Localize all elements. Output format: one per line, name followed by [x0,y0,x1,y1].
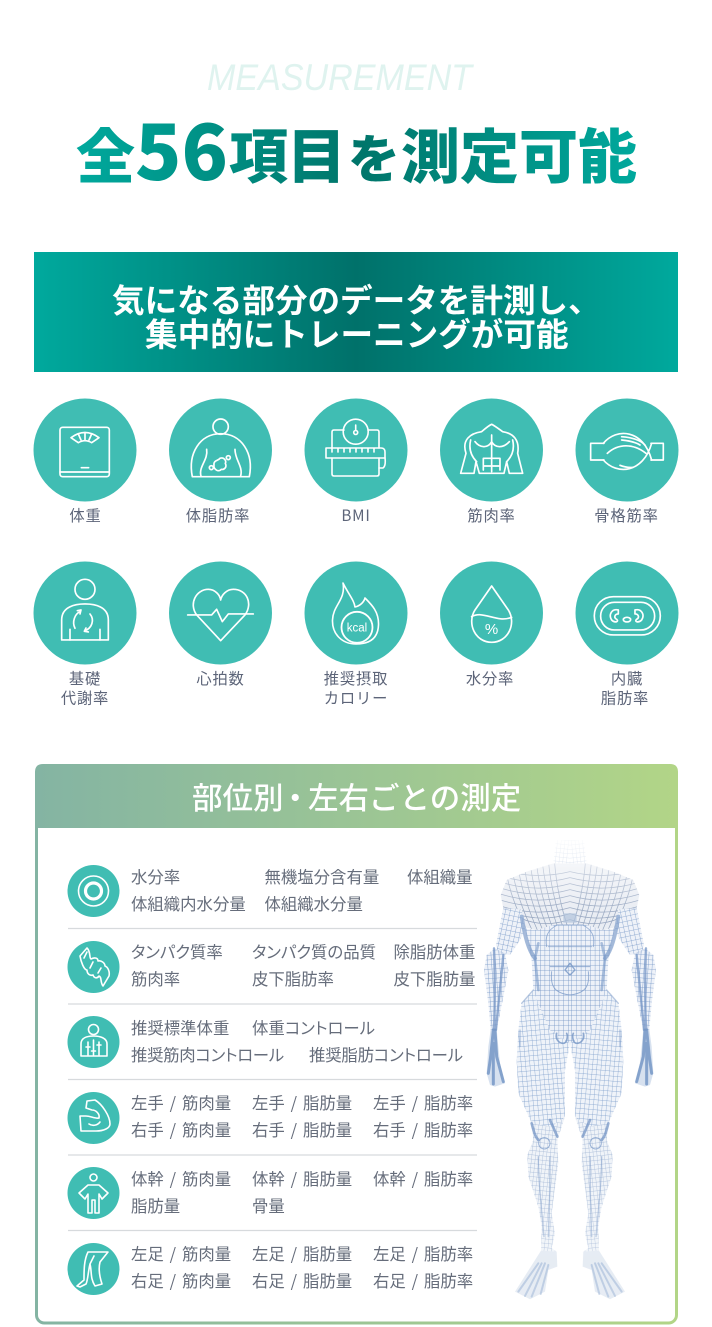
title: 全56項目を測定可能: 全 [76,110,135,195]
icon: 水分率: % [485,621,498,638]
icon: 水分率: 水分率 [466,667,514,689]
row: 推奨標準体重: 推奨筋肉コントロール [131,1042,284,1066]
banner [34,252,678,372]
icon: 水分率 [440,562,543,689]
row: 左足右足: 右足 / 脂肪率 [373,1268,473,1292]
icon: 骨格筋率: 骨格筋率 [594,504,659,526]
icon: 心拍数: 心拍数 [196,667,245,689]
label: MEASUREMENT: MEASUREMENT [207,57,474,98]
icon: 体脂肪率 [169,398,272,526]
title: 全56項目を測定可能: 目 [287,110,346,195]
row: タンパク質率: タンパク質率 [131,939,223,963]
icon: 体重 [34,398,136,526]
panel header [35,764,678,828]
row: 左足右足: 左足 / 脂肪量 [252,1241,352,1265]
icon: 心拍数 [169,562,272,689]
title: 全56項目を測定可能: 56 [135,92,228,202]
row: 左手右手: 左手 / 脂肪量 [252,1090,352,1114]
row: 左足右足: 左足 / 筋肉量 [131,1241,231,1265]
banner text: 気になる部分のデータを計測し、 [112,275,601,322]
row: 左足右足: 右足 / 筋肉量 [131,1268,231,1292]
icon: 推奨摂取カロリー: カロリー [324,686,388,708]
panel header: 部位別 [192,774,284,818]
row: タンパク質率: タンパク質の品質 [252,939,376,963]
panel: metric icons grid [34,398,678,708]
row: 推奨標準体重: 体重コントロール [252,1015,375,1039]
wireframe body figure [484,840,656,1299]
row: 左手右手: 左手 / 脂肪率 [373,1090,473,1114]
title: 全56項目を測定可能: 項 [229,110,288,195]
row: タンパク質率: 皮下脂肪率 [252,966,334,990]
icon: 内臓脂肪率: 脂肪率 [601,686,649,708]
row: タンパク質率: 筋肉率 [131,966,180,990]
row: 体幹 [68,1166,473,1219]
icon: BMI [304,398,408,526]
icon: 体重: 体重 [69,504,102,526]
row: 推奨標準体重: 推奨標準体重 [131,1015,229,1039]
title: 全56項目を測定可能: 測定可能 [401,110,637,195]
banner text: 集中的にトレーニングが可能 [145,309,569,356]
row: 体幹: 脂肪量 [131,1193,180,1217]
row: 水分率: 体組織量 [407,864,473,888]
icon: 基礎代謝率 [34,562,136,708]
icon: 推奨摂取カロリー [304,562,408,708]
panel header: 左右ごとの測定 [308,774,521,818]
icon: 内臓脂肪率 [576,562,678,708]
row: タンパク質率: 除脂肪体重 [394,939,475,963]
row: 左足右足 [68,1241,473,1295]
title: 全56項目を測定可能 [76,92,637,202]
row: 水分率: 無機塩分含有量 [264,864,379,888]
icon: BMI: BMI [341,504,371,526]
row: 体幹: 体幹 / 脂肪率 [373,1166,473,1190]
row: 水分率: 水分率 [131,864,180,888]
row: 水分率: 体組織水分量 [264,891,363,915]
icon: 骨格筋率 [576,398,678,526]
icon: 基礎代謝率: 基礎 [69,667,101,689]
row: タンパク質率 [68,939,475,993]
panel header: ・ [280,774,310,818]
row: タンパク質率: 皮下脂肪量 [394,966,475,990]
icon: 推奨摂取カロリー: 推奨摂取 [324,667,388,689]
row: 推奨標準体重 [68,1015,463,1068]
row: 左手右手: 右手 / 筋肉量 [131,1117,231,1141]
row: 体幹: 骨量 [252,1193,285,1217]
icon: 筋肉率: 筋肉率 [467,504,516,526]
banner text [112,275,601,356]
row: 水分率: 体組織内水分量 [131,891,246,915]
title: 全56項目を測定可能: を [348,118,400,193]
icon: 体脂肪率: 体脂肪率 [186,504,250,526]
icon: 推奨摂取カロリー: kcal [347,622,367,634]
row: 体幹: 体幹 / 筋肉量 [131,1166,231,1190]
icon: 筋肉率 [440,398,543,526]
row: 推奨標準体重: 推奨脂肪コントロール [309,1042,463,1066]
row: 左手右手: 左手 / 筋肉量 [131,1090,231,1114]
row: 左手右手: 右手 / 脂肪量 [252,1117,352,1141]
icon: 基礎代謝率: 代謝率 [61,686,109,708]
row: 体幹: 体幹 / 脂肪量 [252,1166,352,1190]
panel: 部位別・左右ごとの測定 [35,764,678,1323]
row: 左足右足: 左足 / 脂肪率 [373,1241,473,1265]
row: 左手右手: 右手 / 脂肪率 [373,1117,473,1141]
row: 水分率 [68,864,473,917]
row: 左手右手 [68,1090,473,1144]
icon: 内臓脂肪率: 内臓 [611,667,643,689]
row: 左足右足: 右足 / 脂肪量 [252,1268,352,1292]
